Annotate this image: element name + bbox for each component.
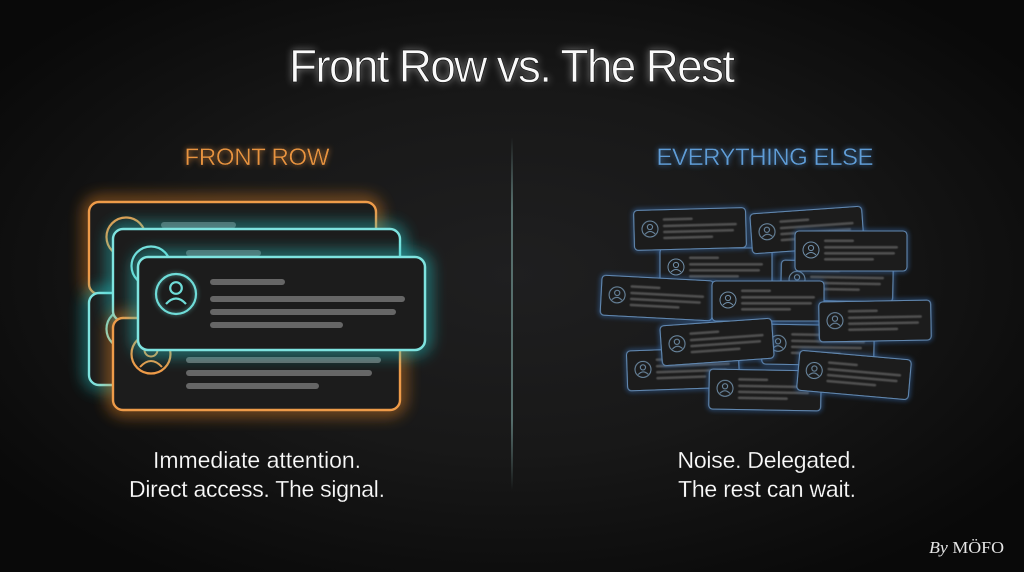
icon: front card avatar (156, 274, 196, 314)
credit: By MÖFO (929, 538, 1004, 557)
small card (795, 231, 907, 271)
panel: everything else card pile (600, 206, 931, 411)
card: front cyan (138, 257, 425, 350)
heading: front row: FRONT ROW (184, 144, 330, 171)
text: front row caption (129, 447, 385, 502)
small card (796, 350, 912, 400)
text: front row caption: Direct access. The signal. (129, 476, 385, 502)
card: middle cyan (113, 229, 400, 321)
small card (660, 248, 772, 288)
heading: everything else: EVERYTHING ELSE (656, 144, 874, 171)
small card (626, 347, 740, 391)
text: everything else caption (678, 447, 856, 502)
small card (660, 318, 774, 366)
card: back left cyan (89, 293, 376, 385)
small card (600, 275, 714, 321)
title: Front Row vs. The Rest (289, 40, 735, 92)
panel: front row card stack (89, 202, 425, 410)
card: back orange (89, 202, 376, 294)
divider (511, 137, 513, 490)
heading: front row: FRONT ROW (184, 144, 330, 171)
small card (762, 324, 874, 366)
text: front row caption: Immediate attention. (153, 447, 361, 473)
small card (712, 281, 824, 321)
text: everything else caption: Noise. Delegated. (678, 447, 856, 473)
small card (709, 369, 821, 411)
small card (750, 206, 864, 254)
front card text bars (210, 279, 405, 328)
small card (819, 300, 931, 342)
small card (781, 260, 893, 302)
title: Front Row vs. The Rest (289, 40, 735, 92)
heading: everything else: EVERYTHING ELSE (656, 144, 874, 171)
text: everything else caption: The rest can wait. (678, 476, 856, 502)
small card (633, 208, 747, 250)
card: lower orange (113, 318, 400, 410)
